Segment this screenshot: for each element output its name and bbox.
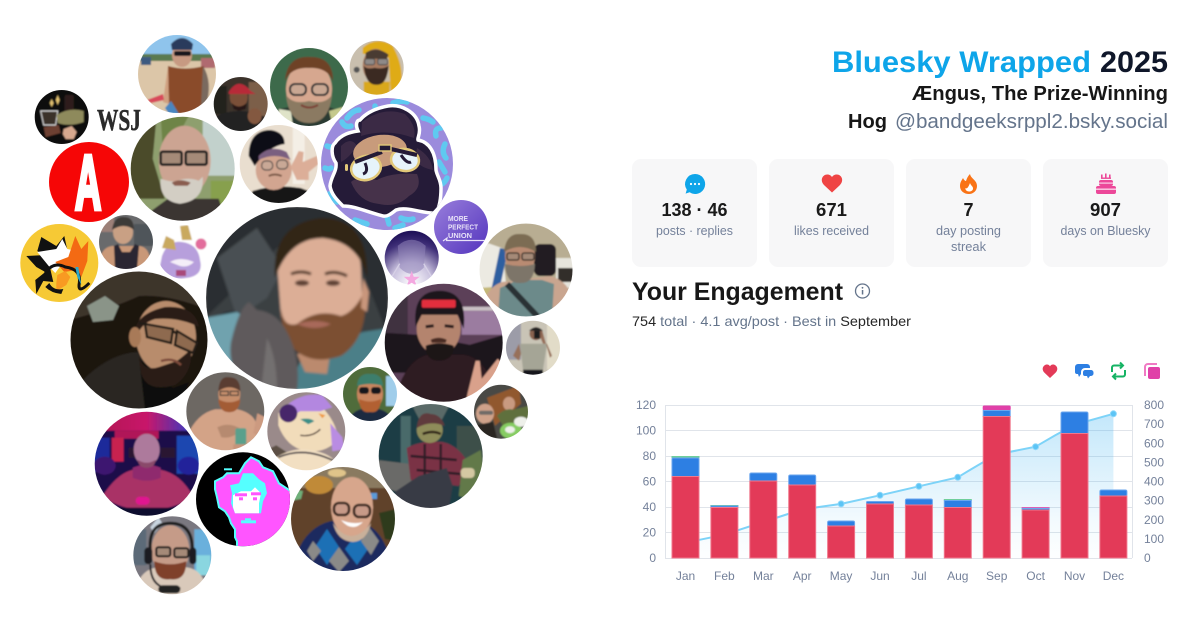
- right axis labels: 400: [1144, 474, 1164, 488]
- title: Bluesky Wrapped 2025: 2025: [1100, 46, 1168, 79]
- panel: avatar bubble cluster: [19, 34, 574, 595]
- stat label: likes received: [794, 224, 869, 238]
- left axis labels: 0: [649, 551, 656, 565]
- cumulative line: [686, 414, 1113, 543]
- stat label: days on Bluesky: [1060, 224, 1151, 238]
- bar Nov: [1061, 412, 1088, 558]
- left axis labels: 20: [643, 526, 656, 540]
- bar Jun: [866, 502, 894, 558]
- left axis labels: 100: [636, 424, 656, 438]
- left axis labels: 40: [643, 500, 656, 514]
- avatar: More Perfect Union logo: UNION: [448, 231, 472, 240]
- avatar: man with headset: [132, 515, 212, 595]
- avatar: black collage illustration: [34, 89, 90, 145]
- bar Aug: [944, 499, 972, 558]
- month labels: Feb: [714, 569, 735, 583]
- icon: cake: [1096, 174, 1116, 194]
- month labels: Jul: [911, 569, 927, 583]
- avatar: More Perfect Union logo: [433, 199, 489, 255]
- display name line one: Ængus, The Prize-Winning: [912, 83, 1168, 105]
- stat value: 671: [816, 200, 847, 220]
- month labels: Nov: [1064, 569, 1085, 583]
- avatar: pixel art portrait: [195, 451, 291, 547]
- bar Mar: [750, 473, 777, 558]
- stat value: 907: [1090, 200, 1121, 220]
- left axis labels: 80: [643, 449, 656, 463]
- right axis labels: 800: [1144, 398, 1164, 412]
- avatar: More Perfect Union logo: MORE: [448, 214, 468, 223]
- avatar: purple creature illustration: [160, 225, 208, 279]
- avatar: man with glasses in dark car: [69, 270, 209, 410]
- text: engagement summary: 754 total · 4.1 avg/post · Best in September: [632, 313, 911, 329]
- month labels: Dec: [1103, 569, 1124, 583]
- stat value: 7: [963, 200, 974, 220]
- left axis labels: 120: [636, 398, 656, 412]
- left axis labels: [636, 398, 656, 565]
- panel: stat posting streak: [906, 159, 1031, 267]
- bar Jul: [905, 499, 932, 558]
- month labels: [676, 569, 1124, 583]
- avatar: yellow hood man: [349, 40, 405, 96]
- bar Sep: [983, 406, 1011, 558]
- bar Feb: [710, 505, 738, 558]
- chart grid: [665, 405, 1132, 558]
- month labels: Jan: [676, 569, 695, 583]
- bar Jan: [672, 456, 700, 558]
- avatar: man with red headband, peace sign: [384, 283, 504, 403]
- stat label: [936, 224, 1001, 254]
- avatar: red A logo: A: [75, 139, 101, 226]
- bar Oct: [1022, 507, 1050, 558]
- right axis labels: 700: [1144, 417, 1164, 431]
- avatar: couple at a table: [473, 384, 529, 440]
- icon: heart: [822, 174, 842, 192]
- icon: chat bubble: [685, 174, 705, 194]
- month labels: Mar: [753, 569, 774, 583]
- month labels: Sep: [986, 569, 1008, 583]
- avatar: beach photo: [137, 34, 217, 114]
- icon: info: [856, 284, 870, 298]
- month labels: Aug: [947, 569, 968, 583]
- header: title and user name: [832, 46, 1168, 133]
- avatar: More Perfect Union logo: PERFECT: [448, 222, 478, 232]
- panel: stat days on Bluesky: [1043, 159, 1168, 267]
- avatar: pale purple line portrait: [384, 230, 440, 286]
- panel: stat likes received: [769, 159, 894, 267]
- right axis labels: 600: [1144, 436, 1164, 450]
- avatar: red A logo: [49, 142, 129, 222]
- avatar: flannel orc illustration: [378, 403, 485, 509]
- avatar: man with sunglasses and teal cap: [342, 366, 398, 422]
- chart: monthly engagement bars and cumulative line: [636, 398, 1164, 583]
- icon: quotes legend: [1145, 364, 1160, 379]
- avatar: man in black tank top: [98, 214, 154, 270]
- month labels: Jun: [870, 569, 890, 583]
- title: Bluesky Wrapped 2025: Bluesky Wrapped: [832, 46, 1091, 79]
- stat label: streak: [951, 240, 987, 254]
- logo: WSJ: WSJ: [97, 102, 141, 137]
- right axis labels: 200: [1144, 513, 1164, 527]
- avatar: mirror selfie: [505, 320, 561, 378]
- left axis labels: 60: [643, 474, 656, 488]
- avatar: man with green background: [269, 47, 349, 127]
- month labels: May: [830, 569, 852, 583]
- panel: stat posts and replies: [632, 159, 757, 267]
- right axis labels: [1144, 398, 1164, 565]
- icon: reposts legend: [1112, 362, 1125, 380]
- line points: [838, 411, 1116, 507]
- display name line two and handle: @bandgeeksrppl2.bsky.social: [895, 111, 1168, 133]
- stat label: day posting: [936, 224, 1001, 238]
- icon: replies legend: [1075, 364, 1094, 378]
- avatar: man in car with seat belt: [479, 223, 574, 317]
- bar May: [828, 521, 855, 558]
- avatar: yellow spiky logo: [19, 223, 99, 303]
- avatar: smiling bald man in argyle sweater: [290, 466, 396, 572]
- bar Dec: [1100, 490, 1127, 558]
- stat value: 138 · 46: [662, 200, 728, 220]
- avatar: cartoon bear with eye patch: [266, 391, 346, 475]
- right axis labels: 0: [1144, 551, 1151, 565]
- avatar: man in black cap making peace sign: [239, 124, 319, 204]
- stat label: posts · replies: [656, 224, 733, 238]
- heading: Your Engagement: Your Engagement: [632, 278, 844, 306]
- right axis labels: 300: [1144, 494, 1164, 508]
- bars: [672, 406, 1127, 558]
- avatar: shirtless mirror selfie: [185, 371, 265, 452]
- month labels: Apr: [793, 569, 812, 583]
- icon: heart legend: [1043, 364, 1057, 378]
- bar Apr: [789, 475, 816, 558]
- month labels: Oct: [1026, 569, 1046, 583]
- icon: flame: [960, 174, 977, 194]
- avatar: large centre photo, bearded man with cat: [205, 206, 389, 390]
- avatar: neon-lit man in sweater: [94, 411, 201, 518]
- cumulative area: [686, 414, 1113, 558]
- display name line two and handle: Hog: [848, 111, 887, 133]
- right axis labels: 500: [1144, 456, 1164, 470]
- avatar: bald man with grey beard: [130, 116, 237, 223]
- legend: engagement type icons: [1043, 362, 1160, 380]
- avatar: red cap man: [213, 76, 269, 134]
- avatar: cartoon bearded man on purple: [320, 97, 454, 231]
- right axis labels: 100: [1144, 532, 1164, 546]
